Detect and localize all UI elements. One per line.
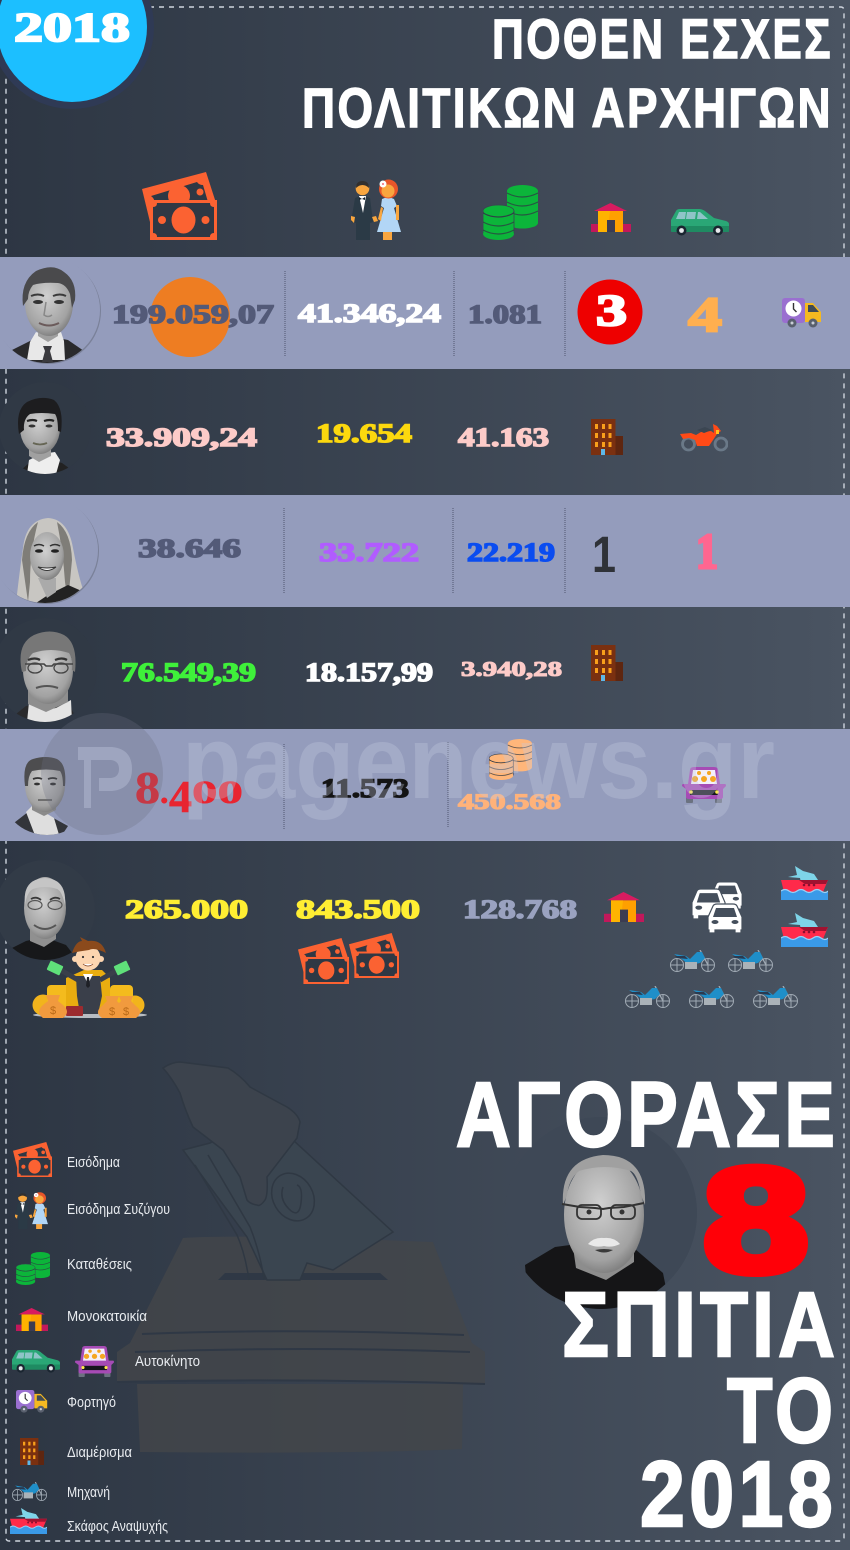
icon: white cars bbox=[692, 882, 742, 933]
icons: boats bbox=[781, 866, 828, 947]
row 6: Varoufakis bbox=[0, 860, 828, 1018]
icon: truck bbox=[782, 298, 821, 328]
legend: apartment: Διαμέρισμα bbox=[67, 1444, 132, 1461]
legend: spouse income bbox=[15, 1192, 170, 1229]
portrait bbox=[5, 632, 76, 722]
income value: 4 bbox=[169, 772, 192, 822]
house count: 1 bbox=[592, 526, 616, 583]
portrait bbox=[5, 398, 68, 474]
legend: car bbox=[12, 1346, 200, 1377]
businessman clipart: $ bbox=[123, 1006, 129, 1018]
icon: car bbox=[671, 209, 729, 236]
legend: deposits: Καταθέσεις bbox=[67, 1256, 132, 1273]
deposits value: 128.768 bbox=[463, 895, 577, 924]
deposits value: 41.163 bbox=[458, 423, 549, 452]
legend: motorbike bbox=[12, 1482, 110, 1501]
income value: 33.909,24 bbox=[106, 423, 257, 452]
portrait: Papadimoulis bbox=[525, 1155, 666, 1309]
legend: apartment bbox=[20, 1438, 132, 1465]
callout: bought 8 houses bbox=[456, 1064, 839, 1546]
row 3 band bbox=[0, 495, 850, 607]
car count: 1 bbox=[696, 523, 718, 579]
income value: 199.059,07 bbox=[112, 300, 274, 329]
legend: truck bbox=[16, 1390, 116, 1413]
legend: spouse income: Εισόδημα Συζύγου bbox=[67, 1201, 170, 1218]
highlight circle bbox=[150, 277, 230, 357]
header icons row bbox=[142, 172, 729, 240]
legend: income bbox=[13, 1142, 120, 1177]
deposits value: 1.081 bbox=[468, 300, 542, 329]
legend: motorbike: Μηχανή bbox=[67, 1484, 110, 1501]
row 3: Gennimata bbox=[8, 513, 718, 604]
income value: 00 bbox=[192, 775, 243, 811]
icon: motorbike bbox=[680, 424, 727, 450]
income value bbox=[135, 762, 243, 822]
icon: deposits bbox=[483, 185, 538, 240]
spouse income value: 843.500 bbox=[296, 895, 420, 924]
row 2: Tsipras bbox=[5, 398, 728, 474]
legend: detached house bbox=[16, 1308, 147, 1331]
legend: boat: Σκάφος Αναψυχής bbox=[67, 1518, 168, 1535]
icon: detached house bbox=[591, 203, 631, 232]
spouse income value: 19.654 bbox=[316, 419, 412, 448]
income value: . bbox=[160, 774, 168, 811]
businessman clipart bbox=[32, 937, 147, 1018]
icon: apartment bbox=[591, 645, 623, 681]
spouse income value: 41.346,24 bbox=[298, 299, 441, 328]
row 4: Koutsoumbas bbox=[5, 632, 623, 722]
row 5: Velopoulos bbox=[10, 739, 726, 838]
watermark: pagenews.gr bbox=[41, 705, 775, 835]
house count bbox=[578, 280, 642, 344]
icons: motorbikes bbox=[626, 950, 798, 1008]
row 5 band bbox=[0, 729, 850, 841]
income value: 8 bbox=[135, 762, 160, 813]
legend: car: Αυτοκίνητο bbox=[135, 1353, 200, 1370]
badge: 2018 bbox=[0, 0, 154, 109]
income value: 265.000 bbox=[125, 895, 248, 924]
watermark: pagenews.gr: pagenews.gr bbox=[182, 705, 775, 821]
deposits value: 450.568 bbox=[458, 789, 561, 814]
portrait bbox=[14, 757, 68, 835]
icon: income bbox=[142, 172, 217, 240]
row 1 band bbox=[0, 257, 850, 369]
portrait bbox=[10, 267, 101, 364]
icon: apartment bbox=[591, 419, 623, 455]
deposits value: 22.219 bbox=[467, 538, 555, 567]
income value: 38.646 bbox=[138, 534, 241, 563]
income value: 76.549,39 bbox=[121, 658, 256, 687]
legend: truck: Φορτηγό bbox=[67, 1394, 116, 1411]
spouse income value: 18.157,99 bbox=[305, 658, 433, 687]
portrait bbox=[5, 877, 72, 960]
car count: 4 bbox=[688, 286, 722, 342]
deposits value: 3.940,28 bbox=[461, 657, 562, 681]
legend: deposits bbox=[16, 1252, 132, 1285]
businessman clipart: $ bbox=[50, 1005, 56, 1017]
house count: 3 bbox=[596, 286, 627, 335]
icon: deposits bbox=[489, 739, 532, 780]
spouse income value: 11.573 bbox=[321, 774, 409, 803]
legend: income: Εισόδημα bbox=[67, 1154, 120, 1171]
legend bbox=[10, 1142, 200, 1535]
big number 8: 8 bbox=[697, 1141, 815, 1306]
icon: purple car bbox=[682, 767, 726, 803]
row 1: Mitsotakis bbox=[10, 267, 821, 364]
portrait bbox=[8, 513, 99, 604]
badge: 2018: 2018 bbox=[14, 4, 130, 50]
businessman clipart: $ bbox=[109, 1006, 115, 1018]
legend: boat bbox=[10, 1508, 168, 1535]
spouse income value: 33.722 bbox=[319, 538, 419, 567]
icon: house bbox=[604, 892, 644, 922]
title bbox=[302, 7, 833, 139]
icons: money pair bbox=[298, 933, 399, 984]
icon: spouse income bbox=[351, 180, 401, 240]
legend: detached house: Μονοκατοικία bbox=[67, 1308, 147, 1325]
ballot box background illustration bbox=[117, 1062, 485, 1453]
